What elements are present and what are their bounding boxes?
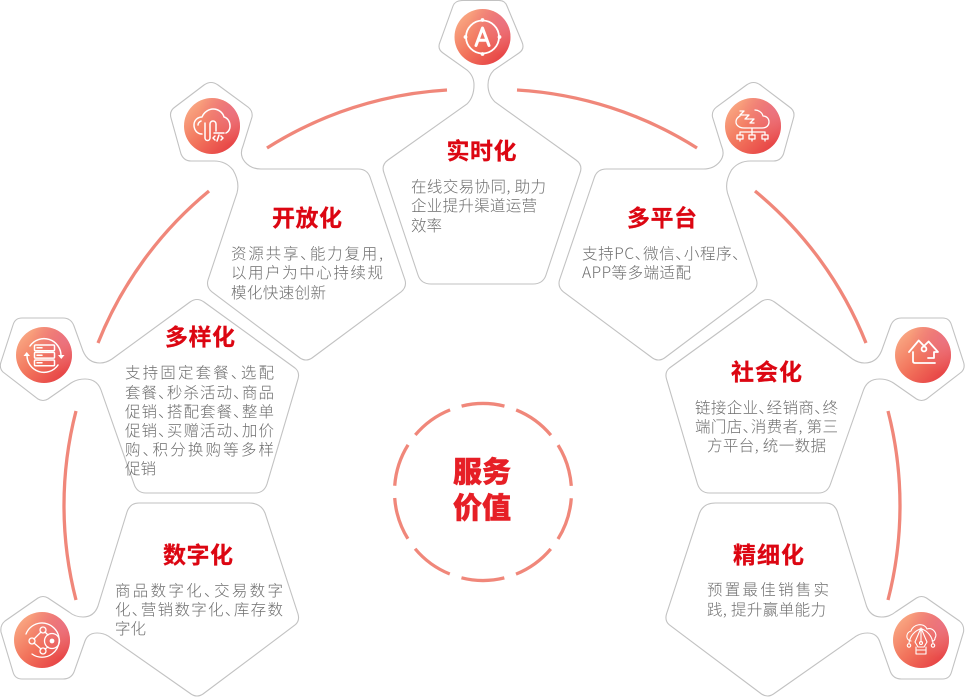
text: 多样化: 促销、买赠活动、加价 bbox=[125, 419, 274, 441]
text: 数字化: 商品数字化、交易数字 bbox=[115, 579, 283, 601]
panel: 多平台 bbox=[559, 82, 794, 360]
arc: top left bbox=[267, 90, 447, 148]
title: 社会化: 社会化 bbox=[731, 359, 802, 385]
text: 精细化: 践, 提升赢单能力 bbox=[707, 598, 826, 620]
arc: upper left bbox=[98, 191, 209, 343]
icon: cloud code bbox=[184, 98, 240, 154]
title: 精细化: 精细化 bbox=[733, 542, 804, 568]
text: 多平台: 支持PC、微信、小程序、 bbox=[582, 242, 740, 264]
text: 开放化: 资源共享、能力复用, bbox=[231, 242, 383, 264]
outline: 多样化 bbox=[0, 300, 299, 493]
text: 多平台: APP等多端适配 bbox=[582, 261, 691, 283]
text: 实时化: 在线交易协同, 助力 bbox=[411, 175, 546, 197]
outline: 多平台 bbox=[559, 82, 794, 360]
panel: 开放化 bbox=[170, 82, 406, 360]
panel: 数字化 bbox=[1, 503, 299, 696]
text: 多样化: 支持固定套餐、选配 bbox=[125, 361, 274, 383]
text: 实时化: 企业提升渠道运营 bbox=[411, 194, 537, 216]
center: 服务价值 bbox=[376, 385, 590, 599]
text: 精细化: 预置最佳销售实 bbox=[707, 578, 829, 600]
outline: 开放化 bbox=[170, 82, 406, 360]
icon: server sync bbox=[16, 327, 72, 383]
title: 实时化: 实时化 bbox=[446, 138, 516, 164]
outline: 数字化 bbox=[1, 503, 299, 696]
title: 多平台: 多平台 bbox=[627, 205, 697, 231]
text: 多样化: 促销 bbox=[125, 457, 156, 479]
text: 数字化: 化、营销数字化、库存数 bbox=[115, 598, 283, 620]
text: 多样化: 套餐、秒杀活动、商品 bbox=[125, 381, 274, 403]
center title: 服务 bbox=[453, 456, 511, 489]
text: 多样化: 促销、搭配套餐、整单 bbox=[125, 400, 274, 422]
text: 开放化: 模化快速创新 bbox=[231, 281, 326, 303]
icon: cloud pen nib bbox=[893, 612, 949, 668]
center title: 价值 bbox=[453, 492, 511, 525]
icon: cloud sleep network bbox=[725, 98, 781, 154]
text: 社会化: 方平台, 统一数据 bbox=[707, 434, 826, 456]
title: 多样化: 多样化 bbox=[165, 324, 235, 350]
text: 开放化: 以用户为中心持续规 bbox=[231, 261, 383, 283]
panel: 社会化 bbox=[666, 300, 964, 493]
text: 社会化: 端门店、消费者, 第三 bbox=[695, 415, 838, 437]
title: 开放化: 开放化 bbox=[272, 205, 342, 231]
arc: upper right bbox=[755, 191, 866, 343]
outline: 精细化 bbox=[666, 503, 964, 696]
arc: lower right bbox=[888, 411, 900, 600]
outline: 社会化 bbox=[666, 300, 964, 493]
icon: house bbox=[895, 327, 951, 383]
panel: 实时化 bbox=[383, 0, 581, 284]
arc: top right bbox=[517, 90, 697, 148]
panel: 精细化 bbox=[666, 503, 964, 696]
panel: 多样化 bbox=[0, 300, 299, 493]
text: 实时化: 效率 bbox=[411, 214, 442, 236]
icon: network nodes bbox=[14, 612, 70, 668]
text: 多样化: 购、积分换购等多样 bbox=[125, 438, 274, 460]
dashed ring bbox=[376, 385, 590, 599]
arc: lower left bbox=[64, 411, 76, 600]
icon: letter A target bbox=[454, 9, 510, 65]
text: 社会化: 链接企业、经销商、终 bbox=[695, 396, 838, 418]
text: 数字化: 字化 bbox=[115, 617, 146, 639]
title: 数字化: 数字化 bbox=[163, 542, 233, 568]
outline: 实时化 bbox=[383, 0, 581, 284]
